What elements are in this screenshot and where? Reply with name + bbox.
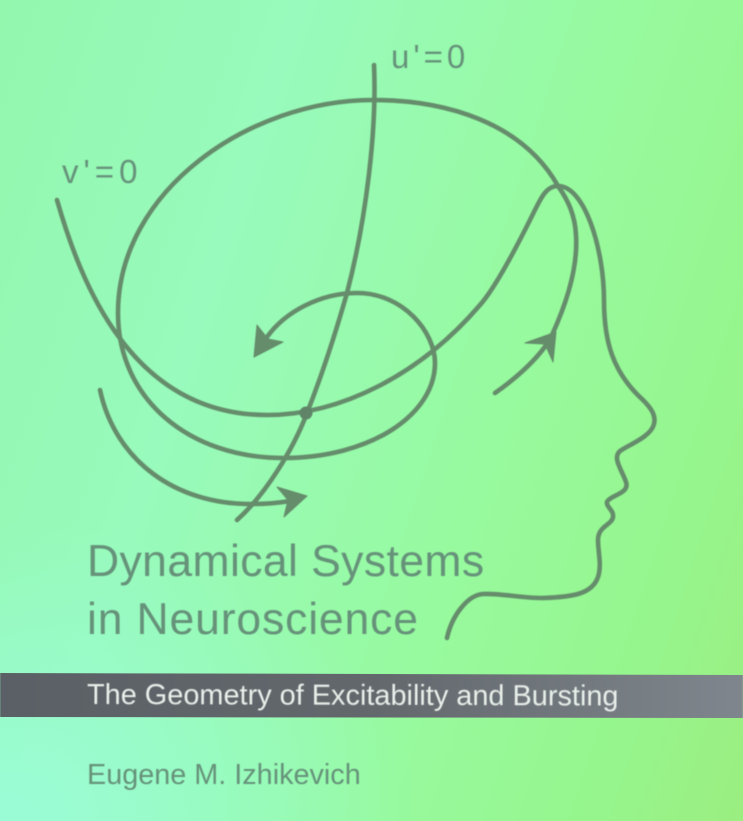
title: in Neuroscience xyxy=(87,595,419,644)
equilibrium dot xyxy=(300,406,312,420)
curve: v nullcline and head outline xyxy=(57,186,655,638)
curve: u nullcline xyxy=(237,65,374,520)
arrowhead: lower trajectory xyxy=(277,487,307,517)
label: v nullcline: v'=0 xyxy=(62,153,142,190)
subtitle band xyxy=(0,672,743,719)
author: Eugene M. Izhikevich xyxy=(87,759,361,791)
title: Dynamical Systems xyxy=(87,537,485,586)
arrowhead: right trajectory xyxy=(525,332,556,362)
label: u nullcline: u'=0 xyxy=(391,38,469,75)
subtitle: The Geometry of Excitability and Bursting xyxy=(87,679,619,712)
curve: lower left trajectory xyxy=(100,390,290,504)
curve: large spiral trajectory xyxy=(118,100,576,458)
arrowhead: spiral xyxy=(254,325,283,357)
title xyxy=(87,537,485,644)
